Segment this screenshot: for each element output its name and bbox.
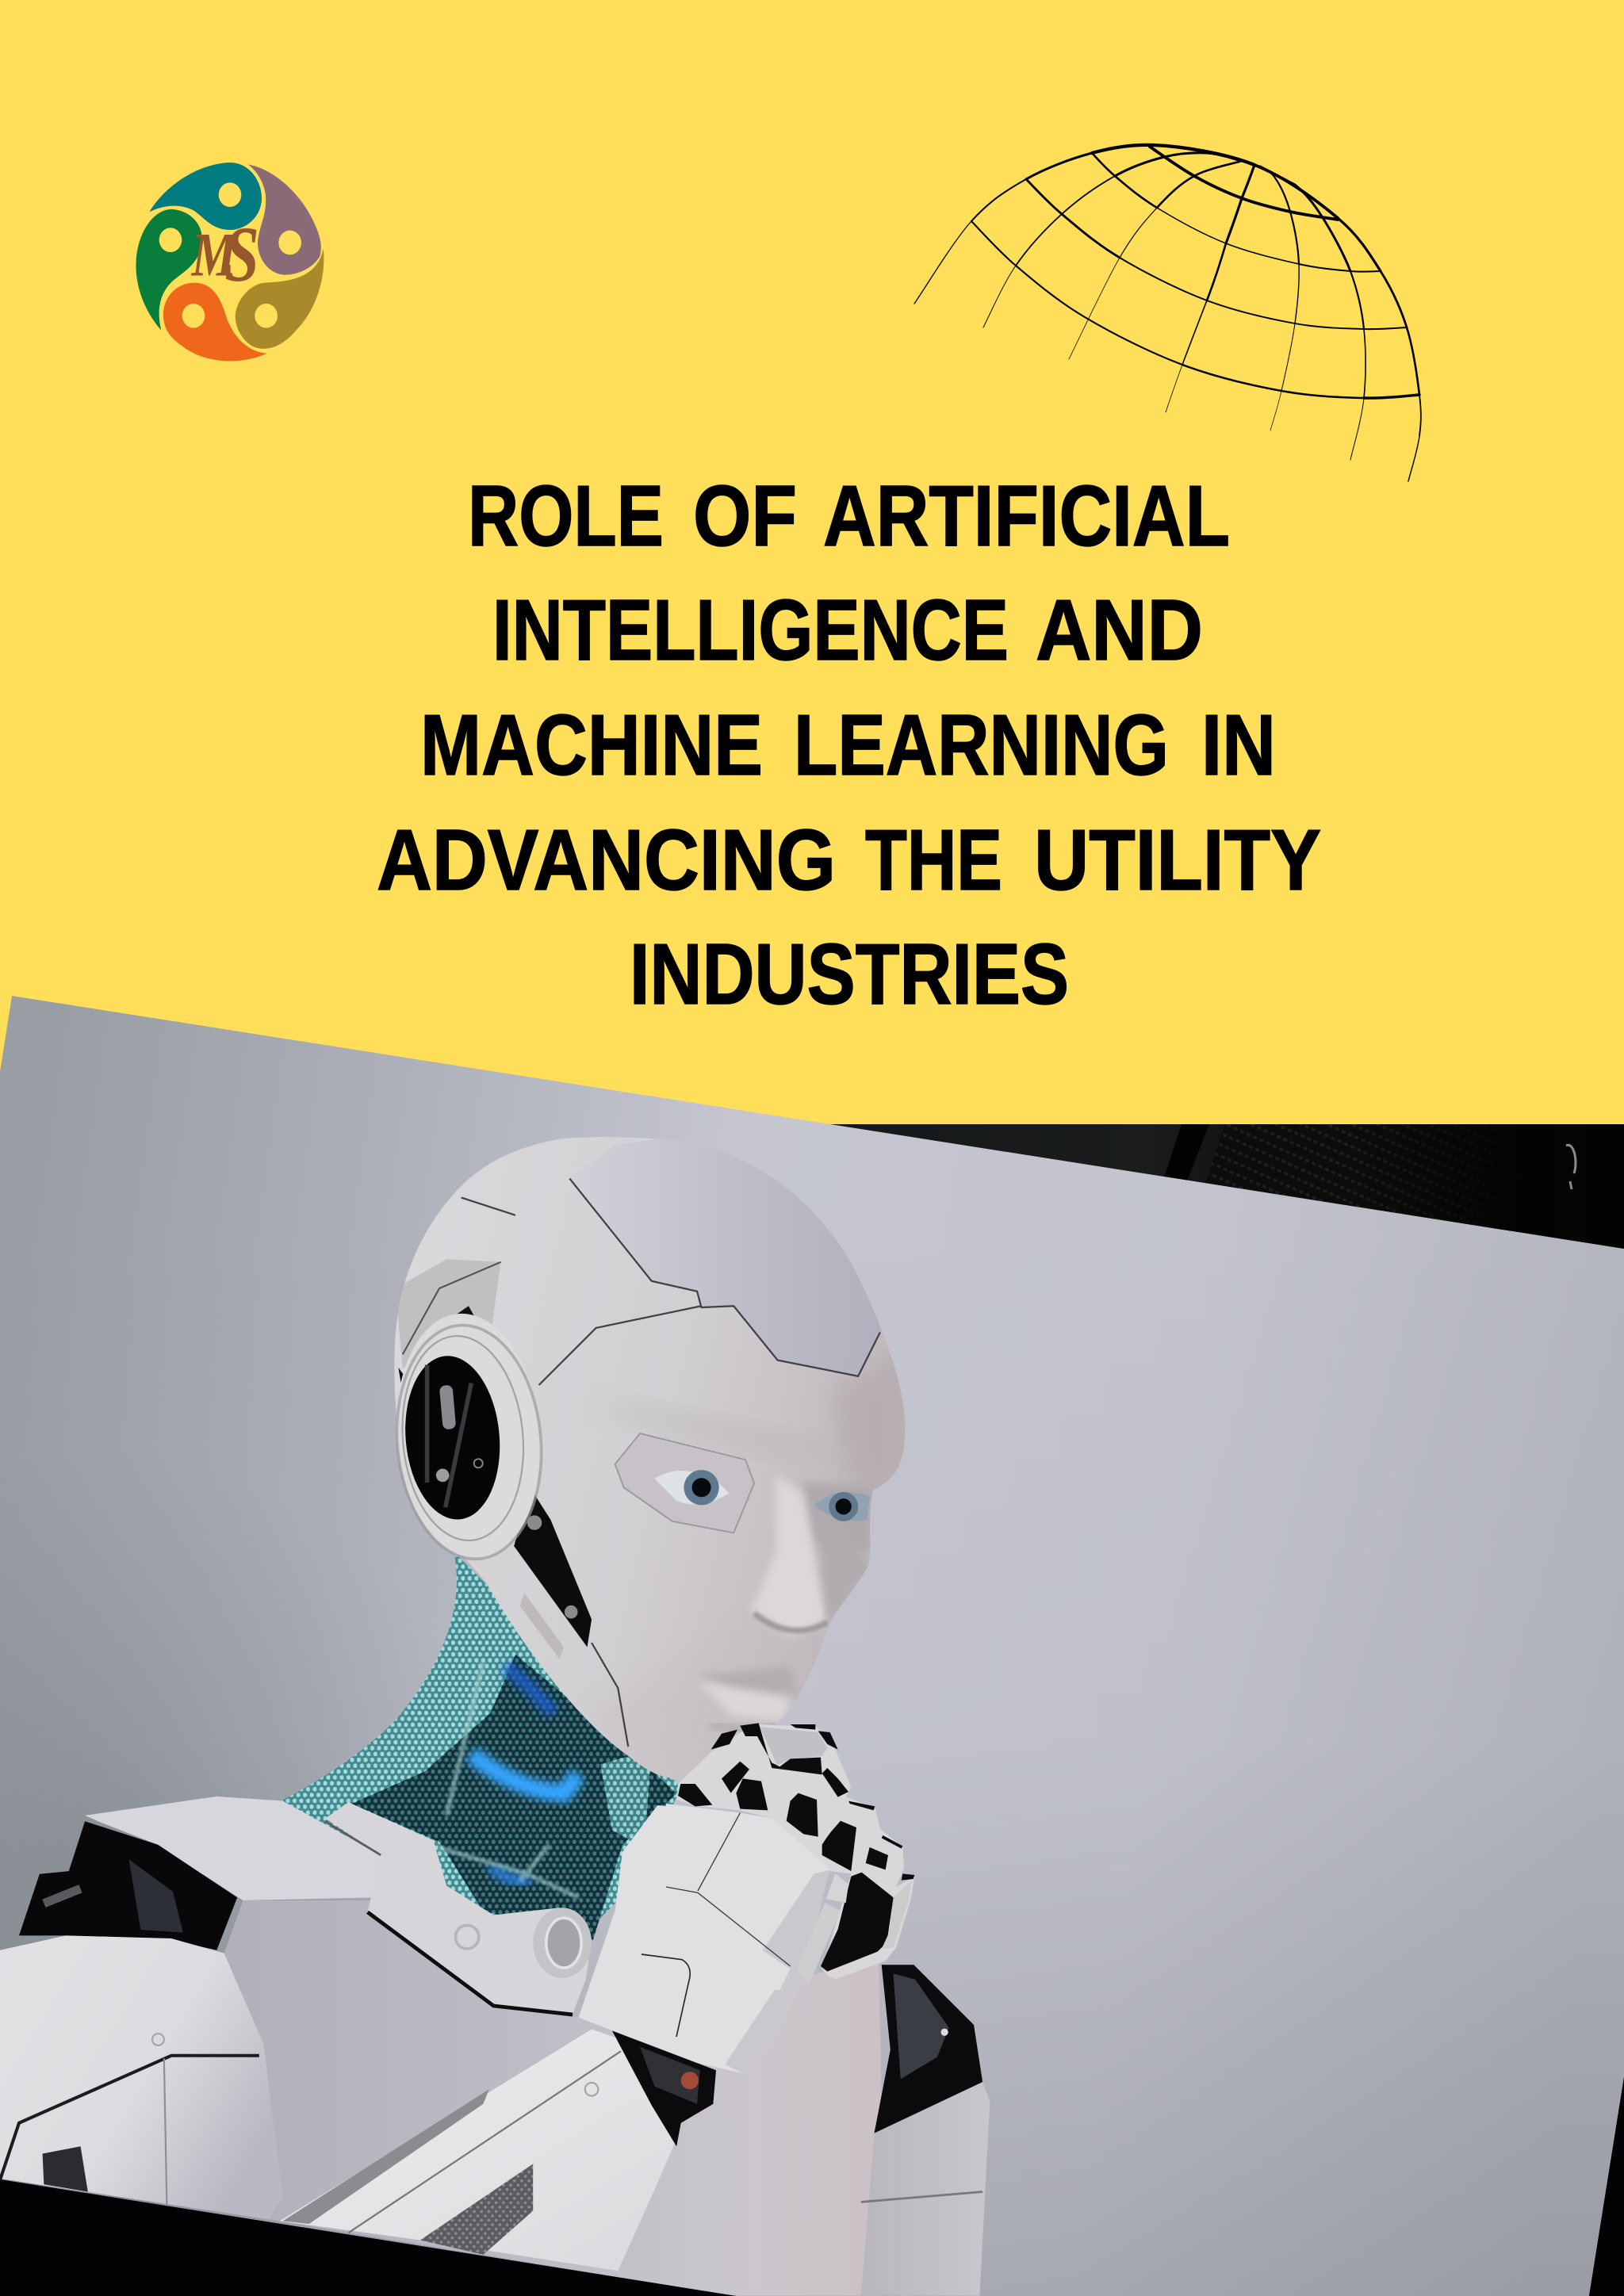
fist lower block bbox=[578, 1805, 829, 2073]
photo: thinking robot, tilted bbox=[0, 996, 1624, 2296]
title: ARTIFICIAL bbox=[823, 468, 1230, 564]
left shoulder cap bbox=[85, 1797, 381, 1900]
title: INDUSTRIES bbox=[630, 926, 1069, 1023]
blue glow: upper bbox=[505, 1667, 553, 1713]
fist panel seam bbox=[642, 1954, 690, 2037]
nose bridge bbox=[751, 1475, 829, 1637]
black shoulder joint bbox=[19, 1821, 237, 1950]
right eye bbox=[814, 1492, 870, 1521]
title: MACHINE bbox=[420, 697, 763, 794]
robot hand bbox=[642, 1723, 914, 2037]
left eye bbox=[654, 1470, 730, 1505]
thumb plates bbox=[826, 1873, 848, 1903]
logo petal: green bbox=[136, 209, 202, 331]
mouth bbox=[697, 1667, 798, 1695]
title: INTELLIGENCE bbox=[492, 582, 1009, 679]
forearm bbox=[280, 2030, 676, 2271]
jaw mechanics bbox=[514, 1487, 592, 1659]
ear dish bbox=[386, 1307, 551, 1565]
left upper arm bbox=[0, 1935, 282, 2220]
blue glow: middle bbox=[472, 1754, 578, 1793]
logo monogram bbox=[190, 210, 259, 298]
icon: wireframe globe bbox=[914, 145, 1421, 481]
nose underside bbox=[754, 1613, 827, 1631]
title: OF bbox=[693, 468, 797, 564]
logo petal: mauve bbox=[248, 164, 321, 275]
dark backdrop behind the photo bbox=[0, 1124, 1624, 2296]
logo monogram: M bbox=[190, 220, 238, 289]
torso bbox=[224, 1900, 886, 2296]
skull dark clips bbox=[398, 1306, 476, 1394]
finger dark joints bbox=[678, 1723, 914, 1972]
title: AND bbox=[1036, 582, 1203, 679]
collar plate bbox=[325, 1802, 592, 2015]
title bbox=[377, 468, 1321, 1023]
wrist red light bbox=[681, 2072, 699, 2089]
title: UTILITY bbox=[1034, 812, 1321, 909]
title: IN bbox=[1201, 697, 1276, 794]
robot head bbox=[386, 1135, 911, 1779]
head seam lines bbox=[462, 1179, 880, 1747]
right elbow, dark joint bbox=[874, 1965, 982, 2133]
left eye plate bbox=[615, 1433, 754, 1533]
fist knuckle block bbox=[666, 1804, 831, 1990]
forearm vent grille bbox=[420, 2164, 533, 2255]
logo petal: orange bbox=[163, 283, 267, 361]
logo petal: teal bbox=[149, 163, 262, 230]
hand base bbox=[676, 1724, 914, 1978]
head shading bbox=[396, 1135, 911, 1779]
wrist joint bbox=[612, 2030, 716, 2146]
yellow header panel bbox=[0, 0, 1624, 1124]
icon: company logo bbox=[136, 163, 324, 361]
photo background bbox=[0, 996, 1624, 2296]
eye plate right bbox=[802, 1482, 873, 1555]
forehead plate bbox=[569, 1135, 911, 1376]
head base bbox=[394, 1137, 905, 1779]
title: THE bbox=[865, 812, 1002, 909]
logo petal: olive bbox=[236, 248, 324, 349]
robot figure bbox=[0, 1135, 990, 2296]
right upper arm bbox=[861, 2082, 990, 2296]
title: ADVANCING bbox=[377, 812, 836, 909]
logo monogram: S bbox=[224, 210, 259, 298]
neck mesh bbox=[282, 1552, 681, 1940]
blue glow: lower bbox=[491, 1867, 530, 1881]
title: LEARNING bbox=[794, 697, 1169, 794]
title: ROLE bbox=[468, 468, 664, 564]
